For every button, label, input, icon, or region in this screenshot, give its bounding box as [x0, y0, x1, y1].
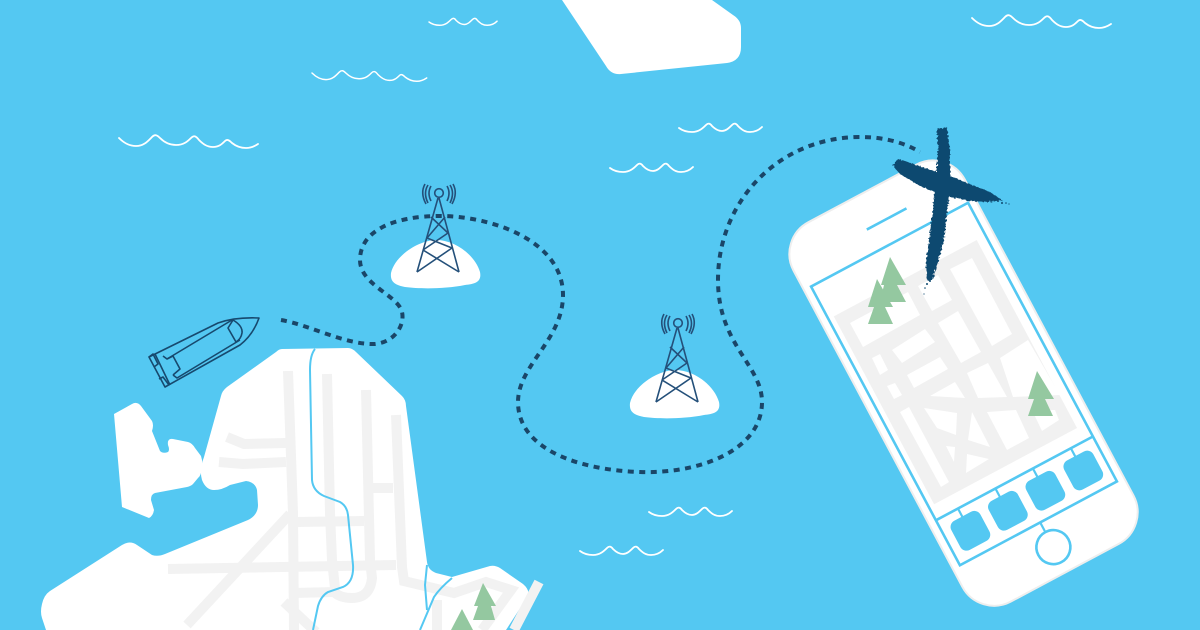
island: top edge: [562, 0, 741, 74]
phone map blocks: [850, 258, 1060, 487]
phone body: [777, 148, 1150, 618]
map base: [834, 240, 1077, 504]
island with tower 2: [630, 314, 719, 418]
map rivers: [310, 349, 452, 630]
island with tower 1: [391, 184, 480, 288]
map roads: [168, 371, 539, 630]
icon: boat: [149, 318, 259, 387]
dock divider: [936, 436, 1093, 520]
home button: [1030, 524, 1076, 570]
dock icons: [944, 440, 1115, 570]
land: small island: [114, 403, 202, 518]
dashed route: [281, 137, 920, 472]
phone: [777, 148, 1150, 618]
phone screen: [811, 203, 1117, 565]
waves: [119, 15, 1111, 555]
icon: radio tower: [417, 184, 459, 272]
land: mainland map: [41, 348, 539, 630]
X mark speckles: [923, 200, 1010, 295]
phone trees: [868, 257, 1054, 416]
speaker: [867, 208, 907, 230]
land trees: [451, 583, 496, 630]
X mark: [893, 127, 1010, 295]
icon: radio tower: [656, 314, 698, 402]
